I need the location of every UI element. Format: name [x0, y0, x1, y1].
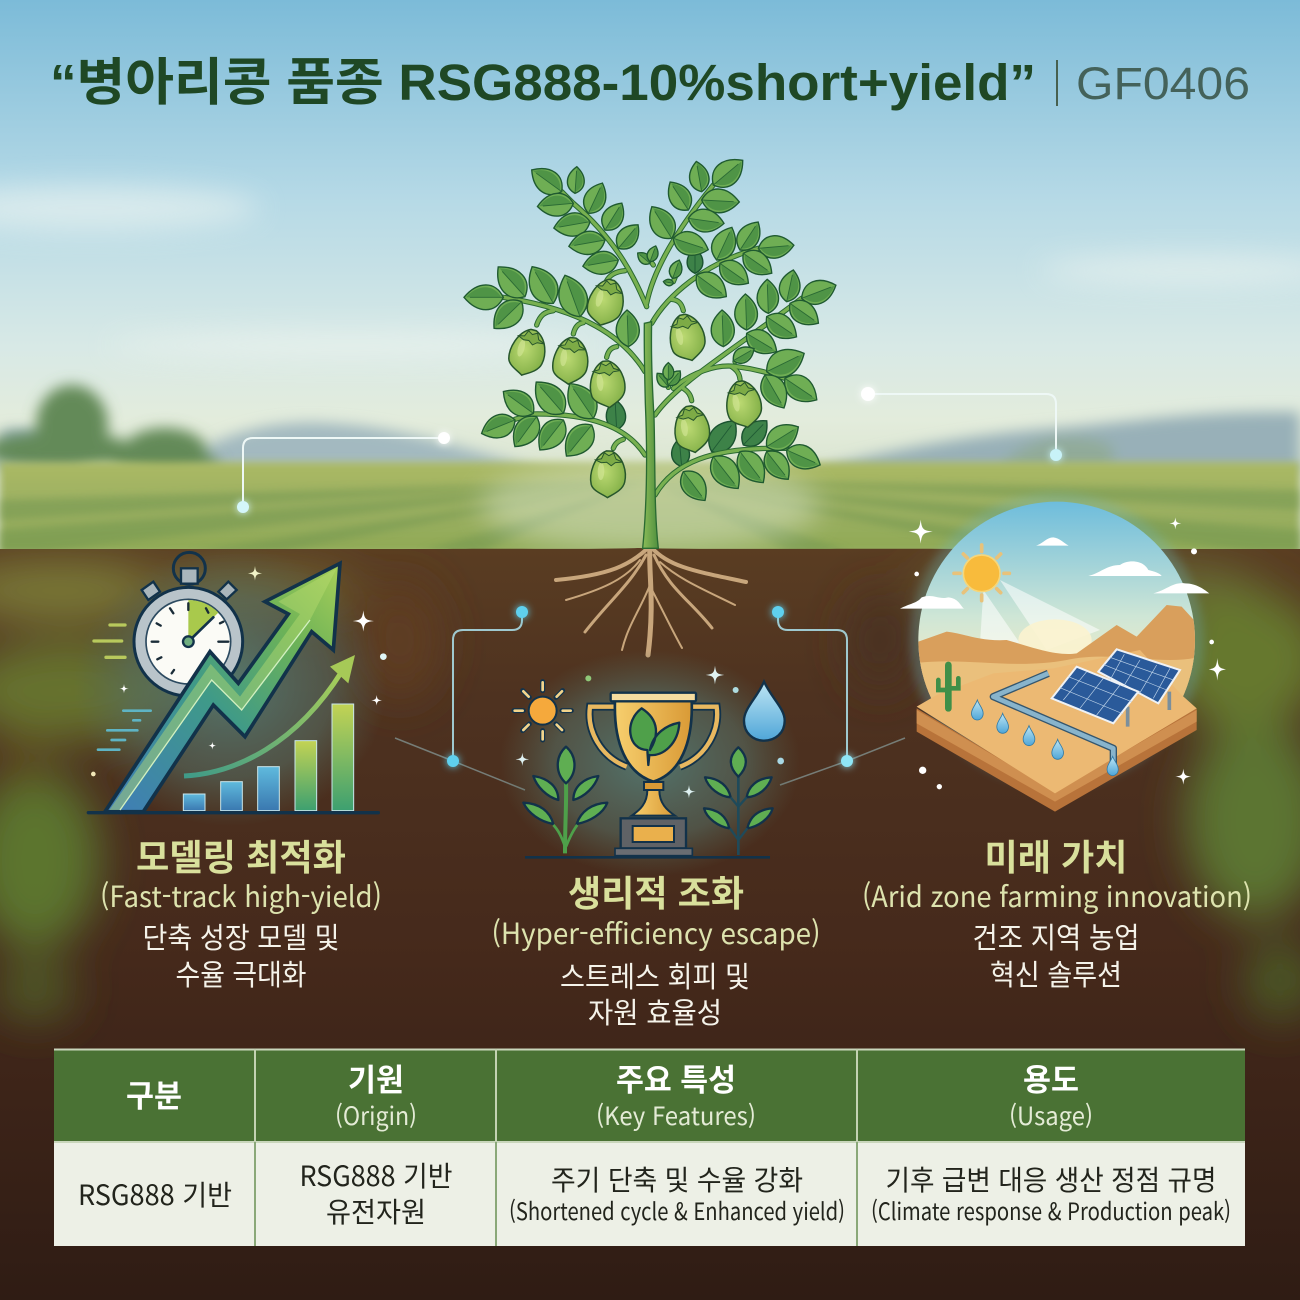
speed lines [94, 625, 151, 750]
column: physiological harmony: 생리적 조화 [568, 865, 744, 917]
water drop [744, 682, 785, 741]
table row: RSG888 기반 [78, 1174, 232, 1214]
table header: 기원 [348, 1055, 404, 1100]
plant [464, 151, 840, 548]
table row [78, 1155, 1231, 1231]
pods [505, 276, 765, 498]
sprout right [704, 747, 773, 855]
column: modelling optimisation [100, 829, 382, 994]
table header: (Key Features) [596, 1097, 756, 1133]
icon: trophy [500, 650, 800, 877]
table row: 기후 급변 대응 생산 정점 규명 [886, 1159, 1216, 1199]
column: future value: 미래 가치 [984, 829, 1128, 881]
table header: 구분 [126, 1071, 182, 1116]
stopwatch [134, 552, 243, 696]
land slab [917, 650, 1197, 812]
table header: (Origin) [335, 1097, 417, 1133]
table header: 주요 특성 [616, 1055, 736, 1100]
title: GF0406 [1076, 58, 1250, 109]
sprout left [523, 747, 607, 853]
table header [126, 1055, 1093, 1133]
table row: 주기 단축 및 수율 강화 [551, 1159, 803, 1199]
roots [556, 545, 746, 655]
column: future value: 건조 지역 농업 [972, 915, 1140, 957]
table row: RSG888 기반 [300, 1155, 452, 1195]
connector: roots to left trophy side [395, 606, 528, 790]
table row: (Shortened cycle & Enhanced yield) [509, 1192, 845, 1227]
curved arrow [184, 655, 355, 776]
connector: plant to right icon [861, 387, 1062, 461]
table [54, 1049, 1245, 1246]
column: future value: 혁신 솔루션 [990, 952, 1122, 994]
column: physiological harmony: 자원 효율성 [588, 990, 722, 1032]
leaves [464, 151, 840, 507]
icon: arid farming with solar panels [900, 493, 1226, 812]
clouds [900, 537, 1209, 609]
bars [183, 704, 354, 811]
sun [514, 682, 571, 740]
solar panels [1052, 649, 1180, 727]
trophy cup [589, 693, 717, 856]
sparkles [909, 517, 1226, 789]
column: future value: (Arid zone farming innovation) [862, 874, 1252, 916]
column: physiological harmony: 스트레스 회피 및 [560, 954, 750, 996]
column: modelling optimisation: 단축 성장 모델 및 [142, 915, 340, 957]
column: modelling optimisation: 수율 극대화 [176, 952, 306, 994]
column: modelling optimisation: 모델링 최적화 [136, 829, 346, 881]
icon: stopwatch and growth chart [73, 547, 387, 827]
column: physiological harmony [492, 865, 820, 1032]
connectors [237, 387, 1062, 790]
connector: roots to right trophy side [772, 606, 905, 785]
stems [503, 185, 802, 548]
water drops [971, 700, 1118, 776]
pipe [993, 673, 1113, 767]
sparkles [91, 566, 387, 776]
main arrow [105, 563, 340, 812]
cactus [938, 665, 958, 708]
column: modelling optimisation: (Fast-track high-yield) [100, 874, 382, 916]
connector: left icon to plant [237, 432, 450, 513]
table row: 유전자원 [326, 1191, 426, 1231]
table header: 용도 [1023, 1055, 1079, 1100]
table header: (Usage) [1009, 1097, 1093, 1133]
title: “병아리콩 품종 RSG888-10%short+yield” [50, 54, 1036, 111]
column: physiological harmony: (Hyper-efficiency escape) [492, 911, 820, 953]
table row: (Climate response & Production peak) [871, 1192, 1231, 1227]
column: future value [862, 829, 1252, 994]
back leaves [605, 248, 774, 467]
mountains [918, 605, 1195, 698]
sparkles [516, 666, 784, 798]
sky disc [918, 502, 1195, 698]
